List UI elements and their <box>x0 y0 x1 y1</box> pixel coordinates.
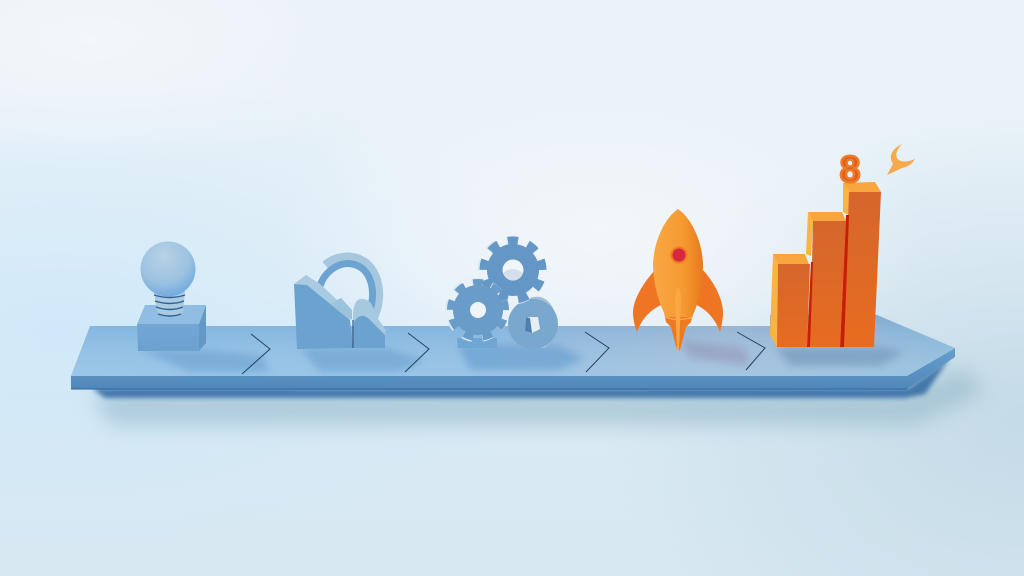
icon: gears and cylinder <box>445 235 558 349</box>
platform shadow <box>90 358 985 425</box>
fins <box>633 270 664 332</box>
centre fin <box>675 287 681 350</box>
bar 1 <box>770 254 810 347</box>
bar chart <box>770 182 881 347</box>
nozzle <box>664 312 693 350</box>
base <box>457 338 497 348</box>
chevron 1 <box>242 334 270 374</box>
bar 2 <box>806 212 846 347</box>
chevron 3 <box>585 332 609 372</box>
object contact shadows <box>140 340 905 372</box>
number 8: 8 <box>840 149 860 190</box>
chevron 2 <box>405 333 429 372</box>
body <box>653 209 703 317</box>
chevron 4 <box>737 332 765 370</box>
icon: rocket <box>633 209 723 350</box>
bar 3 <box>843 182 881 347</box>
arrow-shaped platform <box>71 315 955 389</box>
icon: light bulb on block <box>137 242 206 351</box>
cylinder <box>508 297 558 349</box>
icon: orange crescent <box>887 144 915 175</box>
window <box>670 246 688 264</box>
lower gear <box>445 278 509 343</box>
icon: wedge and arch <box>294 258 386 349</box>
upper gear <box>477 235 547 305</box>
